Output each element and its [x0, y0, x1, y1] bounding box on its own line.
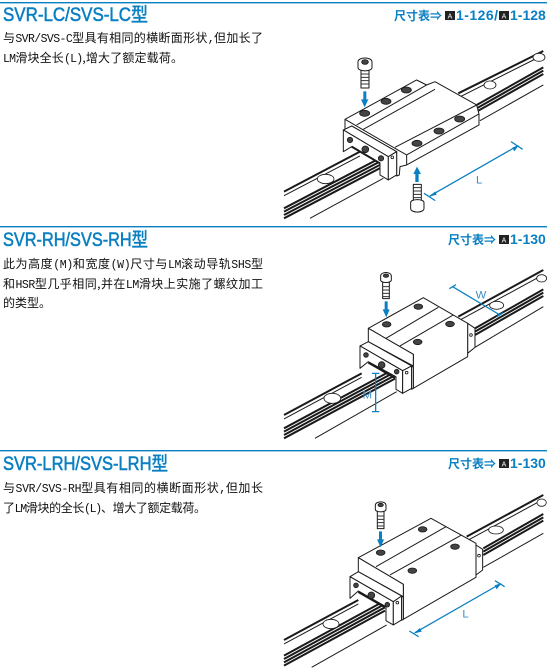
dimension table reference: 1-130	[510, 455, 546, 471]
heading: SVR-LRH/SVS-LRH: SVR-LRH/SVS-LRH型	[3, 453, 168, 475]
dimension L	[409, 581, 505, 637]
heading: SVR-RH/SVS-RH: SVR-RH/SVS-RH型	[3, 229, 148, 251]
dimension table reference: 尺寸表⇒	[394, 8, 442, 23]
dimension L: L	[476, 174, 482, 186]
arrow: bolt	[377, 531, 384, 547]
dimension table reference: 尺寸表⇒	[448, 456, 496, 471]
icon: top bolt	[358, 58, 372, 88]
dimension table reference: A	[448, 14, 453, 20]
description text: 与SVR/SVS-RH型具有相同的横断面形状,但加长	[3, 479, 263, 496]
icon: bolt	[375, 502, 386, 529]
description text: 此为高度(M)和宽度(W)尺寸与LM滚动导轨SHS型	[3, 255, 263, 272]
dimension L: L	[462, 609, 469, 621]
rail	[284, 270, 547, 438]
description text: LM滑块全长(L),增大了额定载荷。	[3, 49, 183, 66]
arrow: bolt	[383, 301, 390, 317]
dimension table reference: A	[502, 238, 507, 244]
dimension table reference	[394, 7, 546, 23]
description text: 的类型。	[3, 294, 51, 311]
dimension M: M	[363, 390, 372, 402]
dimension table reference: A	[502, 462, 507, 468]
rail	[284, 495, 546, 667]
dimension table reference	[448, 231, 546, 247]
panel: SVR-LC/SVS-LC	[0, 2, 547, 218]
icon: bottom bolt	[411, 184, 424, 212]
icon: bolt	[381, 272, 391, 299]
dimension W: W	[476, 289, 487, 301]
description text: 和HSR型几乎相同,并在LM滑块上实施了螺纹加工	[3, 275, 263, 292]
panel: SVR-RH/SVS-RH	[0, 226, 547, 438]
description text	[3, 255, 263, 311]
description text	[3, 29, 263, 66]
dimension M	[363, 373, 379, 412]
dimension table reference: 1-128	[510, 7, 546, 23]
heading: SVR-LC/SVS-LC: SVR-LC/SVS-LC型	[3, 4, 148, 26]
LM block	[350, 518, 483, 625]
dimension table reference	[448, 455, 546, 471]
illustration: LM guide block with two bolts and L dimension	[284, 51, 545, 218]
description text: 与SVR/SVS-C型具有相同的横断面形状,但加长了	[3, 29, 263, 46]
arrow: bottom bolt	[413, 167, 421, 182]
dimension table reference: A	[502, 14, 507, 20]
LM block	[343, 80, 479, 180]
description text: 了LM滑块的全长(L)、增大了额定载荷。	[3, 499, 206, 516]
rail	[284, 51, 545, 218]
LM block	[360, 298, 475, 393]
illustration: LM guide block with bolt and M, W dimensions	[284, 270, 547, 438]
dimension W	[449, 285, 503, 317]
panel: SVR-LRH/SVS-LRH	[0, 450, 547, 667]
dimension L	[424, 142, 523, 201]
dimension table reference: 1-126/	[456, 7, 498, 23]
arrow: top bolt	[361, 91, 368, 107]
dimension table reference: 尺寸表⇒	[448, 232, 496, 247]
illustration: long LM guide block with bolt and L dimension	[284, 495, 546, 667]
dimension table reference: 1-130	[510, 231, 546, 247]
description text	[3, 479, 263, 516]
